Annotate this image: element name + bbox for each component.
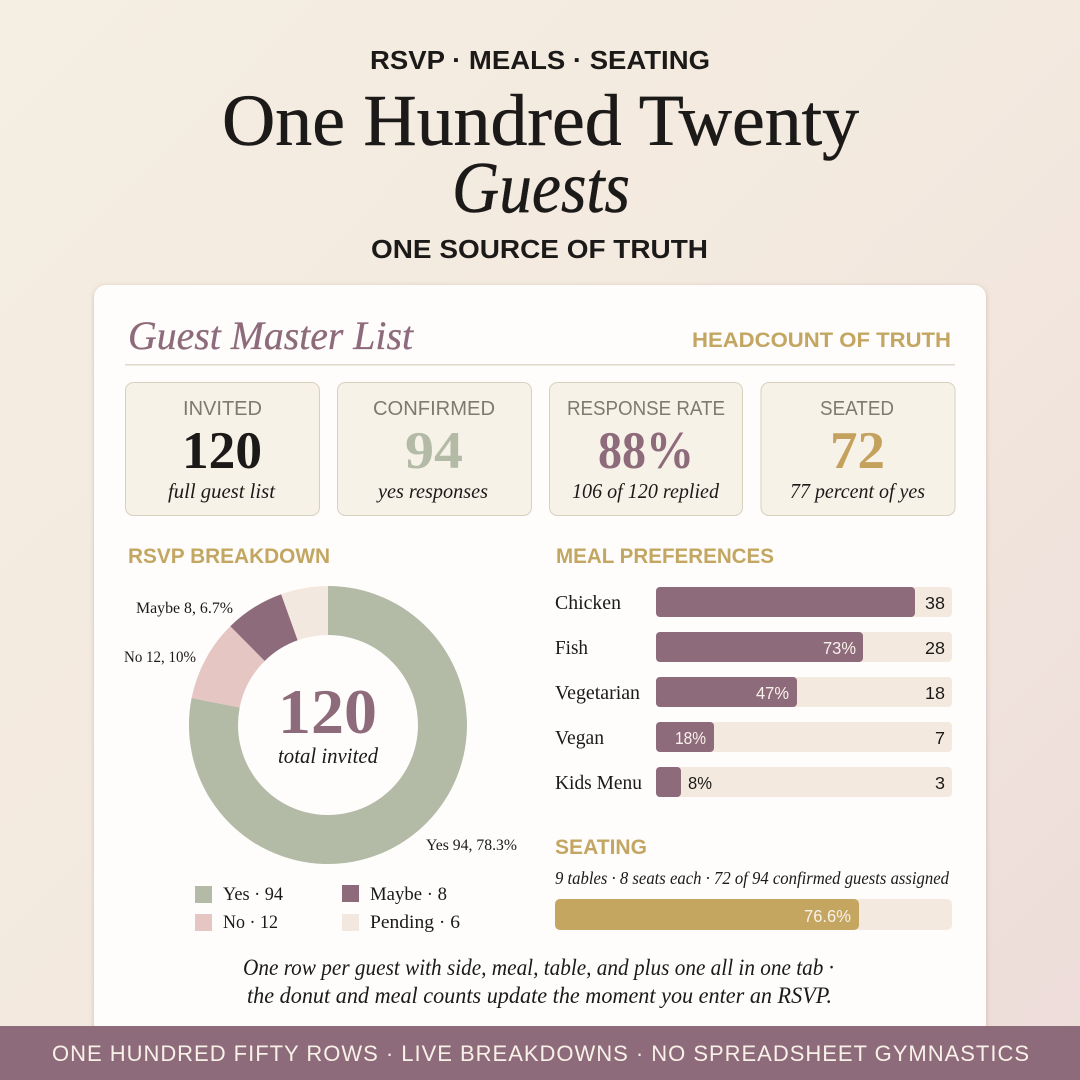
subtitle: ONE SOURCE OF TRUTH (371, 236, 708, 264)
legend: Maybe · 8 (370, 884, 447, 905)
stat card: response rate (550, 382, 742, 516)
bar chart: meal preferences: 38 (925, 593, 945, 613)
stat card: seated: 72 (830, 422, 885, 480)
bar chart: meal preferences: Vegan (555, 727, 604, 749)
stat card: response rate: RESPONSE RATE (567, 398, 725, 420)
bar chart: meal preferences: 18 (925, 683, 945, 703)
bar chart: meal preferences: 3 (935, 773, 945, 793)
stat card: confirmed (338, 382, 532, 516)
panel: guest master list (94, 285, 986, 1075)
stat card: confirmed: yes responses (376, 479, 488, 503)
donut chart: RSVP: total invited (278, 743, 379, 768)
bar chart: meal preferences: Kids Menu (555, 772, 642, 794)
donut chart: RSVP: Maybe 8, 6.7% (136, 600, 233, 617)
seating progress bar: 76.6% (804, 906, 851, 926)
stat card: confirmed: CONFIRMED (373, 398, 495, 420)
bar chart: meal preferences: 28 (925, 638, 945, 658)
header (222, 47, 860, 264)
heading: RSVP breakdown: RSVP BREAKDOWN (128, 545, 330, 568)
donut chart: RSVP: No 12, 10% (124, 649, 196, 666)
bar chart: meal preferences: Chicken (555, 592, 621, 614)
bar chart: meal preferences (555, 587, 952, 797)
legend: Yes · 94 (223, 884, 283, 905)
donut chart: RSVP: Yes 94, 78.3% (426, 837, 517, 854)
stat card: invited: 120 (182, 422, 262, 480)
heading: seating: SEATING (555, 836, 647, 859)
eyebrow: RSVP meals seating: RSVP · MEALS · SEATING (370, 47, 710, 75)
legend (195, 884, 460, 933)
heading: meal preferences: MEAL PREFERENCES (556, 545, 774, 568)
bar chart: meal preferences: 7 (935, 728, 945, 748)
bar chart: meal preferences: Vegetarian (555, 682, 640, 704)
stat card: seated (761, 382, 955, 516)
bottom banner (0, 1026, 1080, 1080)
donut chart: RSVP: 120 (278, 676, 377, 747)
seating progress bar (555, 899, 952, 930)
bar chart: meal preferences: 8% (688, 773, 712, 793)
bottom banner: ONE HUNDRED FIFTY ROWS · LIVE BREAKDOWNS · NO SPREADSHEET GYMNASTICS (52, 1041, 1029, 1066)
panel heading: Guest Master List (128, 313, 414, 358)
footer note (243, 955, 834, 1008)
stat card: response rate: 106 of 120 replied (572, 479, 719, 503)
title line one: One Hundred Twenty (222, 80, 860, 161)
stat card: invited: INVITED (183, 398, 262, 420)
bar chart: meal preferences: 47% (756, 683, 789, 703)
footer note: One row per guest with side, meal, table, and plus one all in one tab · (243, 955, 834, 980)
footer note: the donut and meal counts update the moment you enter an RSVP. (247, 983, 832, 1008)
bar chart: meal preferences: Fish (555, 637, 588, 659)
stat card: seated: 77 percent of yes (790, 479, 925, 503)
bar chart: meal preferences: 18% (675, 728, 706, 748)
stat card: seated: SEATED (820, 398, 894, 420)
stat card: response rate: 88% (598, 422, 694, 480)
bar chart: meal preferences: 73% (823, 638, 856, 658)
legend: No · 12 (223, 912, 278, 933)
title line two: Guests (452, 147, 630, 228)
panel tag: headcount of truth: HEADCOUNT OF TRUTH (692, 329, 951, 352)
stat card: invited: full guest list (168, 479, 276, 503)
legend: Pending · 6 (370, 912, 460, 933)
stat card: invited (126, 382, 320, 516)
stat card: confirmed: 94 (405, 422, 463, 480)
seating note: 9 tables · 8 seats each · 72 of 94 confirmed guests assigned (555, 868, 950, 888)
donut chart: RSVP (124, 586, 517, 864)
